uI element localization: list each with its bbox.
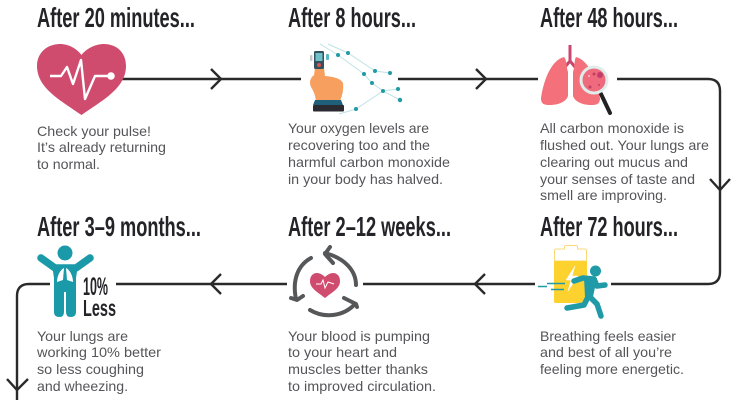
- arrow: connector from 20 minutes to 8 hours: [122, 69, 301, 89]
- panel: after 8 hours: [288, 2, 454, 187]
- arrow: connector from 72 hours to 2-12 weeks: [363, 274, 535, 294]
- arrow: connector from 8 hours to 48 hours: [398, 69, 538, 89]
- heading: After 3–9 months...: [37, 211, 201, 242]
- body text: harmful carbon monoxide: [288, 154, 450, 170]
- panel: after 72 hours: [535, 211, 684, 377]
- body text: feeling more energetic.: [540, 361, 684, 377]
- arrow: connector from 48 hours to 72 hours: [611, 79, 730, 284]
- body text: muscles better thanks: [288, 361, 428, 377]
- body text: and wheezing.: [37, 378, 128, 394]
- icon: circular arrows around heart: [291, 247, 357, 315]
- icon: person with lungs: [41, 246, 90, 317]
- heading: After 8 hours...: [288, 2, 416, 33]
- body text: flushed out. Your lungs are: [540, 137, 709, 153]
- icon: battery and running figure: [535, 246, 605, 316]
- label: 10% less: Less: [83, 295, 116, 321]
- body text: Your oxygen levels are: [288, 120, 429, 136]
- body text: in your body has halved.: [288, 171, 443, 187]
- body text: to your heart and: [288, 344, 397, 360]
- label: 10% less: [83, 273, 116, 321]
- panel: after 3-9 months: [36, 211, 201, 394]
- body text: Check your pulse!: [37, 123, 151, 139]
- heading: After 2–12 weeks...: [288, 211, 451, 242]
- icon: heart with pulse: [37, 44, 126, 115]
- body text: Breathing feels easier: [540, 328, 676, 344]
- body text: Your blood is pumping: [288, 328, 430, 344]
- arrow: connector from 3-9 months going down: [7, 284, 50, 400]
- body text: so less coughing: [37, 361, 144, 377]
- body text: to normal.: [37, 156, 100, 172]
- icon: pulse oximeter on finger with network lines: [310, 44, 402, 114]
- body text: recovering too and the: [288, 137, 430, 153]
- body text: Your lungs are: [37, 328, 128, 344]
- panel: after 48 hours: [540, 2, 713, 203]
- body text: to improved circulation.: [288, 378, 436, 394]
- panel: after 20 minutes: [37, 2, 195, 172]
- body text: clearing out mucus and: [540, 154, 688, 170]
- body text: All carbon monoxide is: [540, 120, 684, 136]
- body text: and best of all you’re: [540, 344, 672, 360]
- body text: working 10% better: [36, 344, 161, 360]
- arrow: connector from 2-12 weeks to 3-9 months: [116, 274, 287, 294]
- panel: after 2-12 weeks: [288, 211, 451, 394]
- body text: smell are improving.: [540, 187, 667, 203]
- label: 10% less: 10%: [83, 273, 108, 301]
- icon: lungs with magnifying glass: [541, 45, 610, 113]
- heading: After 20 minutes...: [37, 2, 195, 33]
- body text: your senses of taste and: [540, 171, 695, 187]
- body text: It’s already returning: [37, 139, 166, 155]
